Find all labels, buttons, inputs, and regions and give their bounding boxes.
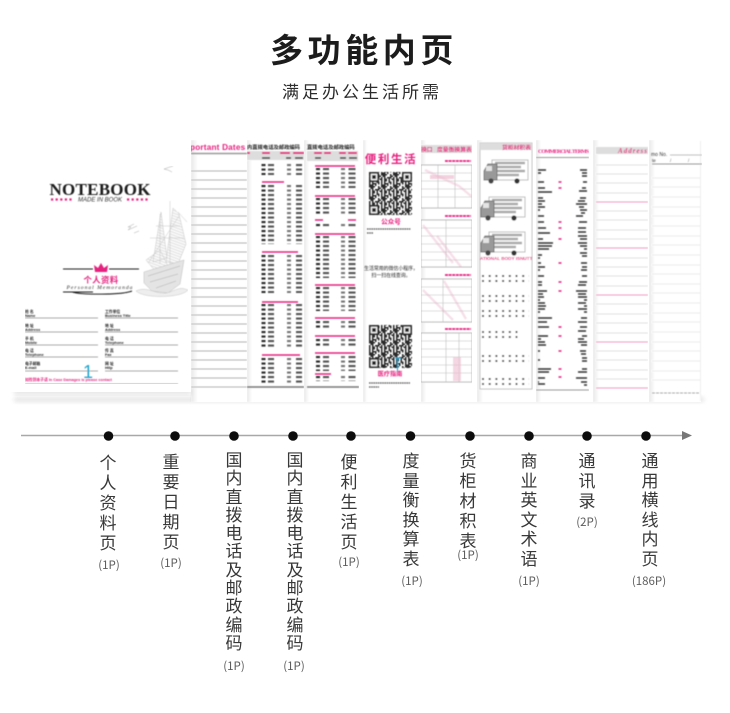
label: convenient life page: 活 (340, 508, 358, 533)
label: ruled inner pages: 线 (642, 506, 658, 530)
personal details form: 手 机 (25, 336, 34, 341)
label: address book: 通 (578, 447, 596, 472)
page 5: convenient life QR codes (363, 140, 418, 402)
page 3: dialling codes: 内直拨电话及邮政编码 (247, 143, 301, 151)
personal details form: Address (25, 328, 40, 332)
label: important dates page (160, 448, 182, 571)
page shadow (14, 397, 704, 402)
label: domestic dialling codes: 拨 (226, 501, 242, 526)
page 10: memo page: / (670, 158, 672, 163)
personal details form (25, 309, 178, 384)
page 1: personal information cover (10, 140, 191, 394)
label: domestic dialling codes: 编 (226, 611, 242, 636)
label: domestic dialling codes: 直 (226, 483, 242, 508)
personal details form: Name (25, 314, 35, 318)
personal details form: 姓 名 (25, 309, 34, 314)
label: ruled inner pages: 内 (642, 525, 658, 550)
page 5 heading: 便利生活 (365, 152, 417, 166)
page 10: memo page: mo No. (651, 152, 667, 158)
label: domestic dialling codes: 邮 (226, 574, 242, 599)
text: (1P) (338, 554, 360, 570)
blue page mark: 1 (83, 362, 93, 382)
label: important dates page: 重 (162, 448, 180, 473)
label: domestic dialling codes continued (283, 446, 305, 674)
page 7: container volume table: ATIONAL BODY ISNUTT (480, 256, 533, 261)
page 2: important dates: portant Dates (190, 143, 246, 152)
label: commercial terms: 术 (520, 525, 538, 550)
page 3: dialling codes (247, 140, 304, 402)
personal details form: Fax (105, 353, 112, 357)
label: convenient life page: 页 (340, 528, 358, 553)
personal details form: 电子邮箱 (25, 361, 40, 366)
page 10: memo page: / (688, 158, 690, 163)
text: (1P) (283, 658, 305, 674)
label: domestic dialling codes continued: 内 (286, 464, 304, 489)
page 8: commercial terms (536, 140, 589, 402)
page 9: address book: Address (617, 147, 648, 155)
label: domestic dialling codes continued: 话 (286, 537, 304, 562)
personal details form: Telephone (105, 341, 124, 345)
page 5: convenient life QR codes: 医疗指南 (378, 370, 402, 378)
personal details form: 网 址 (105, 361, 114, 366)
label: important dates page: 日 (162, 488, 180, 513)
section heading: 个人资料 (83, 275, 119, 285)
text: (186P) (632, 573, 666, 589)
label: domestic dialling codes: 码 (226, 629, 242, 654)
label: domestic dialling codes continued: 拨 (286, 501, 304, 526)
page 7: container volume table: 货柜材积表 (502, 144, 531, 152)
label: personal info page (98, 449, 120, 573)
personal details form: 传 真 (105, 348, 114, 353)
label: domestic dialling codes (223, 446, 245, 674)
text: (1P) (160, 555, 182, 571)
label: container volume table: 柜 (460, 467, 476, 492)
label: conversion table: 衡 (402, 486, 420, 511)
page 5: convenient life QR codes: 公众号 (381, 218, 401, 226)
label: container volume table (457, 447, 479, 563)
page 10: memo page (649, 140, 702, 402)
page 1: personal information cover: Personal Memoranda (66, 285, 133, 291)
label: personal info page: 料 (100, 509, 116, 534)
page 6: conversion tables: 度量衡换算表 (437, 146, 472, 154)
label: domestic dialling codes: 及 (226, 556, 242, 581)
title: 多功能内页 (270, 24, 458, 72)
label: conversion table (401, 447, 423, 589)
label: conversion table: 算 (402, 525, 420, 550)
label: important dates page: 要 (162, 468, 180, 493)
personal details form: Address (105, 328, 120, 332)
page 6: conversion tables: 换口 (421, 146, 433, 154)
label: important dates page: 期 (162, 508, 180, 533)
personal details form: 电 话 (105, 336, 114, 341)
QR code: official account (369, 172, 412, 215)
label: personal info page: 资 (100, 489, 116, 514)
personal details form: 地 址 (105, 323, 114, 328)
text: (1P) (223, 658, 245, 674)
label: conversion table: 表 (402, 544, 420, 570)
text: (2P) (576, 514, 598, 530)
page 6: conversion tables (421, 140, 472, 402)
label: convenient life page: 利 (340, 468, 358, 493)
label: domestic dialling codes: 国 (226, 446, 242, 471)
page 7: container volume table (477, 140, 533, 402)
label: commercial terms (518, 447, 540, 589)
label: ruled inner pages: 页 (642, 544, 658, 570)
text: (1P) (457, 547, 479, 563)
page 4: dialling codes continued: 直拨电话及邮政编码 (307, 143, 355, 151)
label: convenient life page (338, 448, 360, 570)
timeline dots (104, 431, 651, 441)
label: personal info page: 个 (100, 449, 116, 474)
label: conversion table: 换 (402, 506, 420, 530)
label: important dates page: 页 (162, 528, 180, 553)
page stack (10, 140, 704, 402)
label: domestic dialling codes continued: 码 (286, 629, 304, 654)
label: address book (576, 447, 598, 530)
personal details form: Telephone (25, 353, 44, 357)
page 5: convenient life QR codes: 扫一扫在线查询。 (371, 272, 411, 279)
text: (1P) (401, 573, 423, 589)
personal details form: 电 话 (25, 348, 34, 353)
page 10: memo page: te (652, 158, 656, 163)
personal details form: Http (105, 366, 113, 370)
subtitle: 满足办公生活所需 (282, 78, 442, 103)
label: domestic dialling codes continued: 政 (286, 592, 304, 617)
page 4: dialling codes continued (304, 140, 359, 402)
label: ruled inner pages: 用 (642, 466, 658, 492)
label: container volume table: 积 (460, 507, 476, 532)
label: domestic dialling codes continued: 及 (286, 556, 304, 581)
page 1: personal information cover: MADE IN BOOK (78, 198, 123, 204)
label: commercial terms: 业 (520, 466, 538, 492)
label: domestic dialling codes continued: 邮 (286, 574, 304, 599)
label: conversion table: 度 (402, 447, 420, 472)
label: domestic dialling codes continued: 电 (286, 519, 304, 544)
label: conversion table: 量 (402, 466, 420, 492)
sailing ship illustration (128, 166, 188, 297)
label: commercial terms: 语 (520, 544, 538, 570)
page 5: convenient life QR codes: 生活常用的微信小程序， (364, 265, 418, 272)
text: (1P) (518, 573, 540, 589)
label: container volume table: 货 (460, 447, 476, 472)
label: commercial terms: 商 (520, 447, 538, 472)
page 8: commercial terms: COMMERCIAL TERMS (538, 149, 589, 155)
timeline axis with arrow (21, 431, 692, 440)
label: convenient life page: 便 (340, 448, 358, 473)
label: commercial terms: 文 (520, 506, 538, 530)
label: domestic dialling codes: 电 (226, 519, 242, 544)
ornamental crown divider (63, 263, 139, 294)
text: (1P) (98, 557, 120, 573)
notebook logo: NOTEBOOK (50, 180, 151, 199)
personal details form: Business Title (105, 314, 131, 318)
personal details form: 如捡到本子请 In Case Damages is please contact (25, 377, 113, 382)
label: commercial terms: 英 (520, 486, 538, 511)
label: domestic dialling codes continued: 直 (286, 483, 304, 508)
label: domestic dialling codes: 内 (226, 464, 242, 489)
personal details form: 地 址 (25, 323, 34, 328)
label: address book: 录 (578, 487, 596, 512)
personal details form: 工作单位 (105, 309, 120, 314)
page 9: address book (593, 140, 648, 402)
QR code: medical guide (369, 325, 412, 372)
label: ruled inner pages (632, 447, 666, 589)
label: ruled inner pages: 通 (642, 447, 658, 472)
truck icons (481, 160, 528, 256)
label: domestic dialling codes: 政 (226, 592, 242, 617)
page 2: important dates (190, 140, 247, 402)
label: convenient life page: 生 (340, 488, 358, 513)
label: personal info page: 人 (100, 469, 116, 494)
label: address book: 讯 (578, 467, 596, 492)
label: domestic dialling codes: 话 (226, 537, 242, 562)
personal details form: E-mail (25, 366, 36, 370)
label: domestic dialling codes continued: 编 (286, 611, 304, 636)
personal details form: Mobile (25, 341, 37, 345)
label: container volume table: 表 (460, 527, 476, 552)
label: personal info page: 页 (100, 529, 116, 554)
label: container volume table: 材 (460, 487, 476, 512)
label: ruled inner pages: 横 (642, 486, 658, 511)
label: domestic dialling codes continued: 国 (286, 446, 304, 471)
